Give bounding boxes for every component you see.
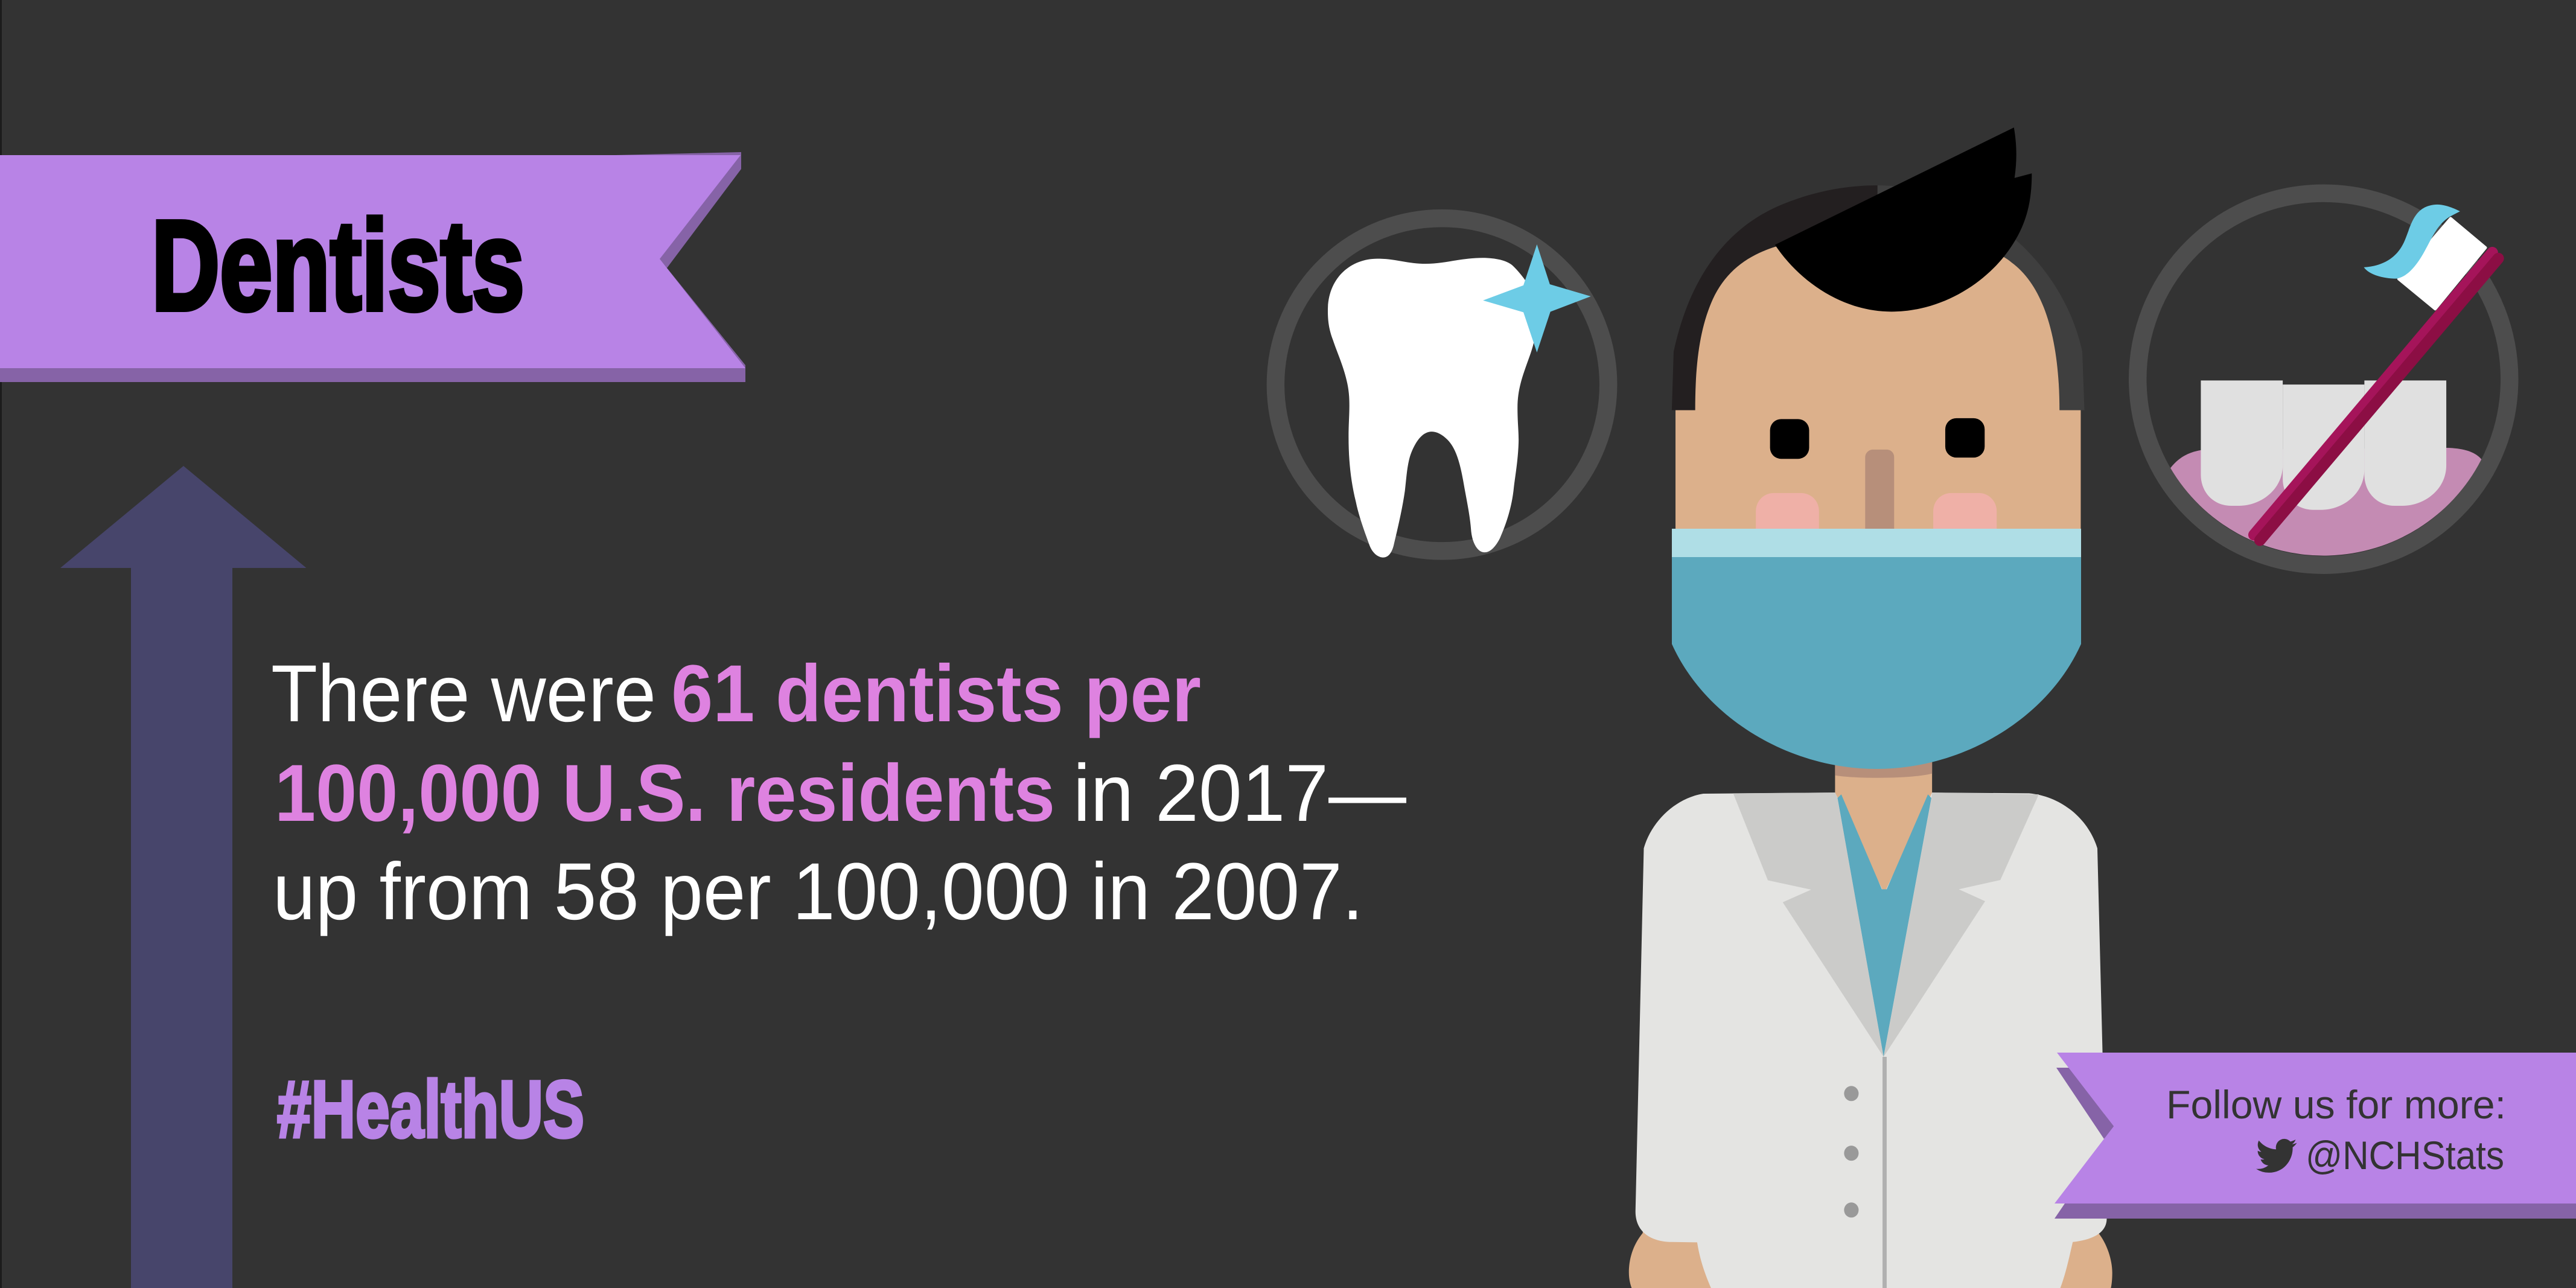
- hands: [1629, 1228, 1714, 1288]
- follow-us banner: [2055, 1053, 2576, 1219]
- buttons: [1844, 1086, 1858, 1101]
- surgical mask: [1672, 529, 2081, 769]
- fringe: [1775, 127, 2032, 311]
- lab coat: [1636, 792, 2106, 1288]
- face: [1675, 236, 2080, 531]
- scrubs: [1837, 794, 1931, 1057]
- text block: dentist statistic: in 2017—: [1073, 748, 1406, 838]
- placket line: [1883, 1057, 1887, 1288]
- arrow: upward trend: [60, 466, 307, 1288]
- hashtag: #HealthUS: [277, 1065, 584, 1155]
- coat and hands: [1629, 760, 2112, 1288]
- gums: [2170, 448, 2482, 556]
- toothbrush: [2254, 205, 2498, 540]
- follow text: Follow us for more:: [2166, 1082, 2506, 1127]
- icon: sparkling tooth in circle: [1275, 218, 1608, 558]
- icon: twitter bird: [2256, 1139, 2297, 1173]
- heading: Dentists: Dentists: [151, 194, 524, 337]
- teeth: [2201, 380, 2446, 510]
- text block: dentist statistic: 61 dentists per: [671, 649, 1201, 739]
- character: dentist: [1629, 127, 2112, 1288]
- text block: dentist statistic: 100,000 U.S. residents: [275, 748, 1055, 838]
- nose: [1865, 450, 1894, 531]
- twitter handle: @NCHStats: [2306, 1133, 2504, 1178]
- icon: toothbrush and teeth in circle: [2138, 193, 2510, 565]
- text block: dentist statistic: There were: [271, 649, 656, 739]
- neck: [1835, 760, 1932, 893]
- title banner: Dentists: [0, 152, 745, 382]
- head: [1672, 127, 2085, 531]
- text block: dentist statistic: [271, 649, 1406, 937]
- hair back: [1672, 185, 1878, 410]
- lapels: [1733, 792, 1884, 1057]
- eyes: [1770, 419, 1809, 459]
- cheeks: [1756, 493, 1819, 531]
- text block: dentist statistic: up from 58 per 100,000 in 2007.: [273, 847, 1363, 937]
